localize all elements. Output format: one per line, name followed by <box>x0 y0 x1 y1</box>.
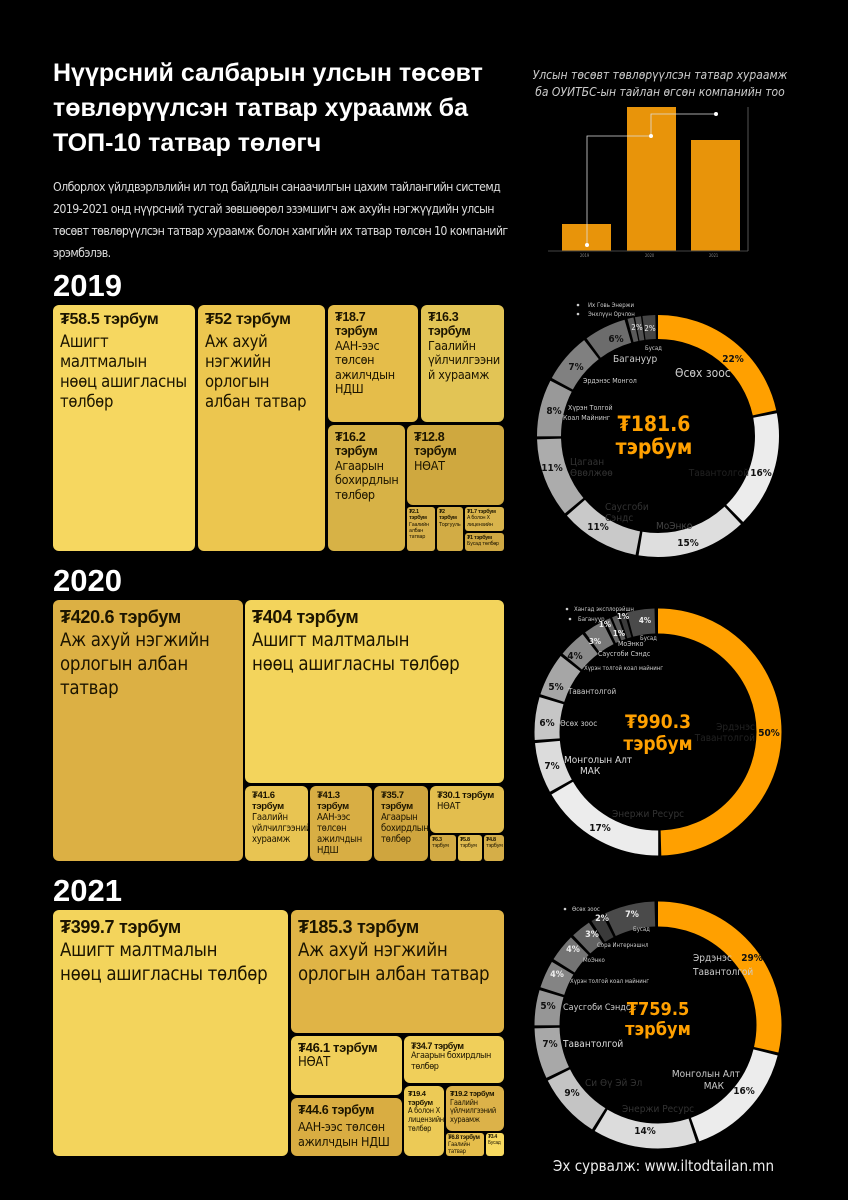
labels 2021: 4% <box>566 945 580 955</box>
box 420.6: татвар <box>60 678 118 699</box>
box 58.5: төлбөр <box>60 392 113 411</box>
donut 2021 <box>540 906 769 1137</box>
box 16.3: Гаалийн үйлчилгээни й хураамж <box>428 338 500 382</box>
box 16.3: ₮16.3 <box>428 310 458 324</box>
box 52 <box>198 305 325 551</box>
labels 2021: 7% <box>542 1039 558 1050</box>
labels 2021: Тавантолгой <box>692 967 753 978</box>
labels 2020: 17% <box>589 823 611 834</box>
box 52: Аж ахуй <box>205 332 267 351</box>
box 44.6: ажилчдын НДШ <box>298 1134 389 1149</box>
legend 2019: Их Говь Энержи <box>588 302 635 309</box>
intro text: төсөвт төвлөрүүлсэн татвар хураамж болон хамгийн их татвар төлсөн 10 компанийг <box>53 224 508 238</box>
box 41.6: ₮41.6 <box>252 790 275 801</box>
box 16.2: Агаарын бохирдлын төлбөр <box>335 458 398 502</box>
center value 2021 <box>625 999 691 1040</box>
small boxes: ₮6.3 <box>432 837 442 843</box>
box 19.4 <box>404 1086 444 1156</box>
labels 2019: Эрдэнэс Монгол <box>583 377 637 385</box>
small boxes <box>446 1133 484 1156</box>
box 404: Ашигт малтмалын <box>252 630 409 651</box>
treemap 2020 <box>53 600 504 861</box>
box 185.3: ₮185.3 тэрбум <box>298 917 419 937</box>
box 399.7: ₮399.7 тэрбум <box>60 917 181 937</box>
intro text: эрэмбэлэв. <box>53 246 111 260</box>
labels 2020: Саусгоби Сэндс <box>598 650 651 658</box>
box 16.2 <box>328 425 405 551</box>
treemap 2020: ₮5.8 <box>460 837 470 843</box>
donut 2019 <box>541 302 772 549</box>
labels 2021: Эрдэнэс <box>693 953 732 964</box>
intro text: Олборлох үйлдвэрлэлийн ил тод байдлын санаачилгын цахим тайлангийн системд <box>53 180 500 194</box>
labels 2019: 11% <box>541 463 563 474</box>
labels 2021: МАК <box>704 1081 725 1092</box>
labels 2021: Хүрэн толгой коал майнинг <box>570 978 649 985</box>
labels 2021: 14% <box>634 1126 656 1137</box>
treemap 2019: А болон Х лицензийн <box>467 515 493 528</box>
labels 2021 <box>540 910 763 1137</box>
box 19.2 <box>446 1086 504 1131</box>
box 420.6: ₮420.6 тэрбум <box>60 607 181 627</box>
box 35.7: Агаарын бохирдлын төлбөр <box>381 812 428 845</box>
labels 2019 <box>541 323 772 549</box>
labels 2021: 16% <box>733 1086 755 1097</box>
labels 2020: МоЭнко <box>618 640 644 648</box>
box 185.3 <box>291 910 504 1033</box>
box 420.6 <box>53 600 243 861</box>
chart title: Улсын төсөвт төвлөрүүлсэн татвар хураамж <box>533 68 788 82</box>
small boxes: ₮2.1 тэрбум <box>409 509 427 521</box>
box 41.3: тэрбум <box>317 801 349 812</box>
box 46.1: НӨАТ <box>298 1055 330 1070</box>
labels 2019: Багануур <box>613 354 657 365</box>
treemap 2021: ₮3.4 <box>488 1134 497 1140</box>
legend 2019 <box>577 302 635 318</box>
legend 2020 <box>566 606 634 623</box>
box 52: ₮52 тэрбум <box>205 311 291 328</box>
labels 2019: 22% <box>722 354 744 365</box>
labels 2019: 6% <box>608 334 624 345</box>
labels 2019: Өвөлжөө <box>570 468 613 479</box>
box 12.8 <box>407 425 504 505</box>
labels 2020: Монголын Алт <box>564 755 632 766</box>
labels 2019: 11% <box>587 522 609 533</box>
intro text <box>53 180 508 260</box>
labels 2020: Энержи Ресурс <box>612 809 684 820</box>
box 19.2: Гаалийн үйлчилгээний хураамж <box>450 1098 496 1124</box>
box 34.7: төлбөр <box>411 1062 439 1072</box>
labels 2020: МАК <box>580 766 601 777</box>
labels 2021: Сора Интернэшнл <box>597 942 648 949</box>
box 30.1 <box>430 786 504 833</box>
labels 2020: 4% <box>639 616 651 625</box>
box 52: албан татвар <box>205 392 306 411</box>
labels 2021: Энержи Ресурс <box>622 1104 694 1115</box>
labels 2019: Саусгоби <box>605 501 649 513</box>
box 12.8: тэрбум <box>414 444 456 458</box>
labels 2019: Хүрэн Толгой <box>568 404 613 412</box>
labels 2019: Бусад <box>645 345 662 352</box>
labels 2019: Цагаан <box>570 457 604 468</box>
treemap 2020: тэрбум <box>460 843 477 849</box>
box 16.2: тэрбум <box>335 444 377 458</box>
small boxes: ₮6.8 тэрбум <box>448 1135 480 1141</box>
box 58.5 <box>53 305 195 551</box>
labels 2019: 16% <box>750 468 772 479</box>
labels 2021: 4% <box>550 970 564 980</box>
box 185.3: Аж ахуй нэгжийн <box>298 940 447 961</box>
labels 2021: 9% <box>564 1088 580 1099</box>
bar chart: 2021 <box>709 253 718 258</box>
labels 2019: 7% <box>568 362 584 373</box>
labels 2021: МоЭнко <box>583 957 606 964</box>
labels 2020: 4% <box>567 651 583 662</box>
labels 2020: 3% <box>589 637 601 646</box>
center value 2019: ₮181.6 <box>618 412 690 436</box>
labels 2019: Сэндс <box>605 513 633 524</box>
box 399.7: нөөц ашигласны төлбөр <box>60 964 267 985</box>
labels 2020: Эрдэнэс <box>716 722 755 733</box>
treemap 2019: ₮2 тэрбум <box>439 509 457 521</box>
bars <box>562 107 740 251</box>
box 34.7: ₮34.7 тэрбум <box>411 1041 464 1051</box>
box 19.4: тэрбум <box>408 1098 433 1107</box>
labels 2020: Өсөх зоос <box>560 719 597 728</box>
box 41.3: ₮41.3 <box>317 790 340 801</box>
treemap 2021: Бусад <box>488 1140 501 1146</box>
box 34.7: Агаарын бохирдлын <box>411 1051 491 1061</box>
small boxes: тэрбум <box>432 843 449 849</box>
box 52: нэгжийн <box>205 352 271 371</box>
labels 2020: 1% <box>613 629 625 638</box>
labels 2019: 15% <box>677 538 699 549</box>
box 44.6: ₮44.6 тэрбум <box>298 1103 374 1117</box>
box 185.3: орлогын албан татвар <box>298 964 489 985</box>
box 16.3: тэрбум <box>428 324 470 338</box>
small boxes <box>407 507 435 551</box>
treemap 2019: Торгууль <box>439 522 460 528</box>
box 58.5: ₮58.5 тэрбум <box>60 311 158 328</box>
treemap 2019: ₮1 тэрбум <box>467 535 492 541</box>
treemap 2019: Бусад төлбөр <box>467 541 499 547</box>
small boxes <box>430 835 456 861</box>
box 399.7: Ашигт малтмалын <box>60 940 217 961</box>
center value 2019 <box>616 412 692 459</box>
small boxes: Гаалийн албан татвар <box>409 522 429 540</box>
box 404: нөөц ашигласны төлбөр <box>252 654 459 675</box>
box 18.7: ААН-ээс төлсөн ажилчдын НДШ <box>335 338 395 396</box>
labels 2021: 2% <box>595 914 609 924</box>
labels 2020: 50% <box>758 728 780 739</box>
intro text: 2019-2021 онд нүүрсний тусгай зөвшөөрөл эзэмшигч аж ахуйн нэгжүүдийн улсын <box>53 202 494 216</box>
labels 2020: 1% <box>617 612 629 621</box>
chart title <box>533 68 788 99</box>
heading 2021: 2021 <box>53 873 122 908</box>
box 404 <box>245 600 504 783</box>
center value 2020: ₮990.3 <box>625 711 691 733</box>
treemap 2020: ₮4.8 <box>486 837 496 843</box>
box 399.7 <box>53 910 288 1156</box>
labels 2020: 5% <box>548 682 564 693</box>
center value 2019: тэрбум <box>616 435 692 459</box>
labels 2020: Хүрэн толгой коал майнинг <box>584 665 663 672</box>
box 52: орлогын <box>205 372 269 391</box>
treemap 2019: ₮1.7 тэрбум <box>467 509 496 515</box>
box 420.6: Аж ахуй нэгжийн <box>60 630 209 651</box>
box 34.7 <box>404 1036 504 1083</box>
labels 2020: Бусад <box>640 635 657 642</box>
labels 2019: 2% <box>644 324 656 333</box>
labels 2021: 3% <box>585 930 599 940</box>
box 44.6: ААН-ээс төлсөн <box>298 1119 385 1134</box>
box 35.7 <box>374 786 428 861</box>
box 46.1: ₮46.1 тэрбум <box>298 1040 377 1055</box>
box 35.7: тэрбум <box>381 801 413 812</box>
labels 2020: Тавантолгой <box>567 687 617 696</box>
bar chart <box>533 68 788 258</box>
box 41.6: тэрбум <box>252 801 284 812</box>
treemap 2021 <box>53 910 504 1156</box>
labels 2019: Тавантолгой <box>688 468 749 479</box>
heading 2019: 2019 <box>53 268 122 303</box>
title: Нүүрсний салбарын улсын төсөвт төвлөрүүлсэн татвар хураамж ба ТОП-10 татвар төлөгч <box>53 59 483 157</box>
box 35.7: ₮35.7 <box>381 790 404 801</box>
bar chart: 2020 <box>645 253 655 258</box>
heading 2020: 2020 <box>53 563 122 598</box>
legend 2019: Энхлүүн Орчлон <box>588 311 635 318</box>
box 41.6 <box>245 786 308 861</box>
source: Эх сурвалж: www.iltodtailan.mn <box>553 1157 774 1175</box>
box 18.7: ₮18.7 <box>335 310 365 324</box>
box 16.2: ₮16.2 <box>335 430 365 444</box>
labels 2020 <box>539 612 780 834</box>
box 46.1 <box>291 1036 402 1095</box>
box 404: ₮404 тэрбум <box>252 607 358 627</box>
labels 2020: 1% <box>599 620 611 629</box>
box 19.4: А болон Х лицензийн төлбөр <box>408 1106 444 1132</box>
labels 2020: Тавантолгой <box>694 733 755 744</box>
box 44.6 <box>291 1098 402 1156</box>
labels 2019: Коал Майнинг <box>563 414 610 422</box>
labels 2021: 29% <box>741 953 763 964</box>
box 41.3: ААН-ээс төлсөн ажилчдын НДШ <box>317 812 362 856</box>
chart title: ба ОУИТБС-ын тайлан өгсөн компанийн тоо <box>535 85 785 99</box>
box 16.3 <box>421 305 504 422</box>
legend 2021: Өсөх зоос <box>572 906 600 913</box>
legend 2020: Багануур <box>578 616 605 623</box>
treemap 2019 <box>53 305 504 551</box>
labels 2019: МоЭнко <box>656 521 693 532</box>
labels 2021: Си Өү Эй Эл <box>585 1078 642 1089</box>
treemap 2020: тэрбум <box>486 843 503 849</box>
legend 2020: Хангад эксплорэйшн <box>574 606 634 613</box>
labels 2021: Саусгоби Сэндс <box>563 1002 630 1013</box>
line series <box>585 112 718 247</box>
box 18.7: тэрбум <box>335 324 377 338</box>
box 41.3 <box>310 786 372 861</box>
labels 2020: 6% <box>539 718 555 729</box>
labels 2020: 7% <box>544 761 560 772</box>
box 420.6: орлогын албан <box>60 654 188 675</box>
box 30.1: НӨАТ <box>437 801 460 812</box>
center value 2021: тэрбум <box>625 1019 691 1040</box>
box 30.1: ₮30.1 тэрбум <box>437 790 494 801</box>
box 12.8: НӨАТ <box>414 458 445 473</box>
box 58.5: Ашигт <box>60 332 108 351</box>
labels 2021: Тавантолгой <box>562 1039 623 1050</box>
center value 2020 <box>623 711 693 755</box>
box 12.8: ₮12.8 <box>414 430 444 444</box>
donut 2020 <box>539 606 780 843</box>
labels 2021: 7% <box>625 910 639 920</box>
box 58.5: нөөц ашигласны <box>60 372 187 391</box>
center value 2021: ₮759.5 <box>627 999 689 1020</box>
labels 2019: 2% <box>631 323 643 332</box>
box 19.2: ₮19.2 тэрбум <box>450 1089 494 1098</box>
small boxes: Гаалийн татвар <box>448 1141 470 1155</box>
box 58.5: малтмалын <box>60 352 147 371</box>
labels 2019: Өсөх зоос <box>675 366 731 380</box>
labels 2019: 8% <box>546 406 562 417</box>
labels 2021: Бусад <box>633 926 650 933</box>
box 19.4: ₮19.4 <box>408 1089 426 1098</box>
bar chart: 2019 <box>580 253 590 258</box>
labels 2021: 5% <box>540 1001 556 1012</box>
labels 2021: Монголын Алт <box>672 1069 740 1080</box>
box 18.7 <box>328 305 418 422</box>
center value 2020: тэрбум <box>623 733 693 755</box>
